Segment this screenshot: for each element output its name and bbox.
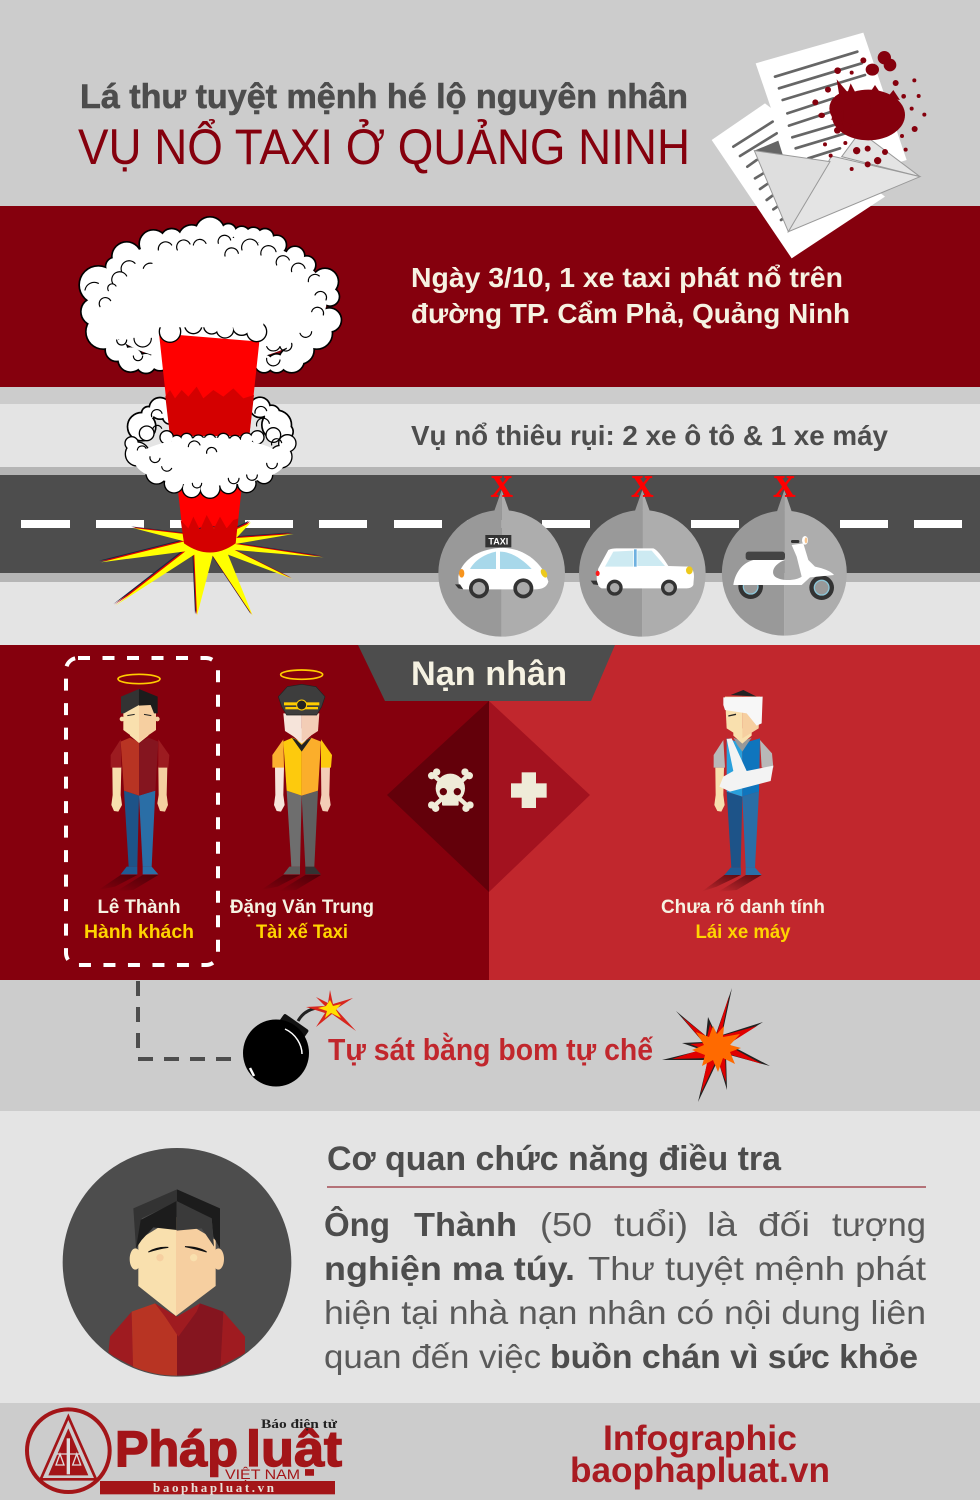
icon: letters, envelope and blood splatter	[712, 33, 926, 258]
logo: Pháp luật Việt Nam	[27, 1409, 342, 1495]
blast star	[99, 521, 324, 616]
icon: taxi	[455, 535, 549, 598]
icon: taxi: TAXI	[488, 536, 508, 546]
body text: quan đến việc	[324, 1338, 541, 1375]
title: VỤ NỔ TAXI Ở QUẢNG NINH	[78, 118, 690, 175]
text: suicide by homemade bomb: Tự sát bằng bom tự chế	[328, 1031, 654, 1067]
panel: investigation	[63, 1140, 926, 1377]
pin: taxi	[438, 469, 565, 637]
body text: Ông	[324, 1205, 390, 1243]
body text	[324, 1205, 926, 1375]
person: Đặng Văn Trung	[261, 670, 332, 891]
heading banner	[358, 645, 615, 701]
person: injured motorbike rider	[702, 690, 773, 892]
labels: victims: Đặng Văn Trung	[230, 897, 374, 918]
panel: victims	[0, 645, 980, 980]
body text: hiện tại nhà nạn nhân có nội dung liên	[324, 1294, 926, 1331]
dashed highlight box	[66, 658, 218, 965]
pin: scooter: X	[773, 469, 795, 503]
body text: (50	[540, 1206, 592, 1243]
labels: victims: Hành khách	[84, 922, 194, 943]
body text: Thư tuyệt mệnh phát	[588, 1250, 926, 1287]
headline: explosion date and place: Ngày 3/10, 1 xe taxi phát nổ trên	[411, 262, 843, 293]
pin: car	[579, 469, 706, 637]
labels: victims: Lái xe máy	[696, 922, 791, 943]
body text: tượng	[832, 1206, 926, 1243]
body text: tuổi)	[614, 1206, 688, 1243]
labels: victims	[84, 897, 825, 943]
person: Lê Thành	[98, 674, 169, 891]
lower cloud back	[128, 398, 292, 440]
upper cloud	[80, 218, 341, 373]
vehicles in map pins	[438, 469, 847, 637]
arrow: dashed connector to bomb	[138, 981, 240, 1059]
icon: medical cross	[511, 772, 547, 808]
heading banner: Nạn nhân	[411, 655, 567, 693]
icon: orange explosion	[662, 988, 770, 1102]
footer credit: Infographic	[603, 1419, 797, 1458]
body text: nghiện ma túy.	[324, 1250, 575, 1287]
footer credit: baophapluat.vn	[570, 1451, 830, 1490]
title	[78, 78, 690, 175]
labels: victims: Tài xế Taxi	[256, 922, 348, 943]
road dashes	[21, 520, 962, 528]
body text: là	[707, 1206, 738, 1243]
footer credit	[570, 1419, 830, 1490]
logo: Pháp luật Việt Nam: Báo điện tử	[261, 1416, 337, 1431]
lower column	[178, 488, 242, 543]
body text: buồn chán vì sức khỏe	[550, 1338, 918, 1375]
icon: car	[591, 548, 694, 596]
icon: scooter	[733, 536, 834, 600]
headline: explosion date and place	[411, 262, 850, 329]
text: burned vehicles: Vụ nổ thiêu rụi: 2 xe ô tô & 1 xe máy	[411, 420, 888, 451]
pin: car: X	[631, 469, 653, 503]
pin: scooter	[722, 469, 847, 636]
bumps over column	[157, 307, 266, 342]
icon: bomb	[243, 990, 356, 1086]
logo: Pháp luật Việt Nam: VIỆT NAM	[225, 1466, 300, 1482]
headline: explosion date and place: đường TP. Cẩm Phả, Quảng Ninh	[411, 298, 850, 329]
body text: đối	[758, 1206, 810, 1243]
logo: Pháp luật Việt Nam: luật	[246, 1421, 342, 1477]
upper column	[159, 333, 259, 436]
labels: victims: Lê Thành	[98, 897, 180, 918]
body text: Thành	[414, 1206, 517, 1243]
icon: mushroom cloud explosion	[80, 218, 341, 616]
pin: taxi: X	[491, 469, 513, 503]
lower cloud front	[126, 427, 295, 498]
avatar	[63, 1148, 291, 1377]
title: Lá thư tuyệt mệnh hé lộ nguyên nhân	[80, 78, 688, 116]
logo: Pháp luật Việt Nam: Pháp	[115, 1421, 238, 1477]
icon: skull	[428, 768, 474, 812]
logo: Pháp luật Việt Nam: baophapluat.vn	[153, 1480, 275, 1495]
column base	[181, 515, 238, 552]
labels: victims: Chưa rõ danh tính	[661, 897, 825, 918]
heading: Cơ quan chức năng điều tra	[327, 1140, 782, 1178]
